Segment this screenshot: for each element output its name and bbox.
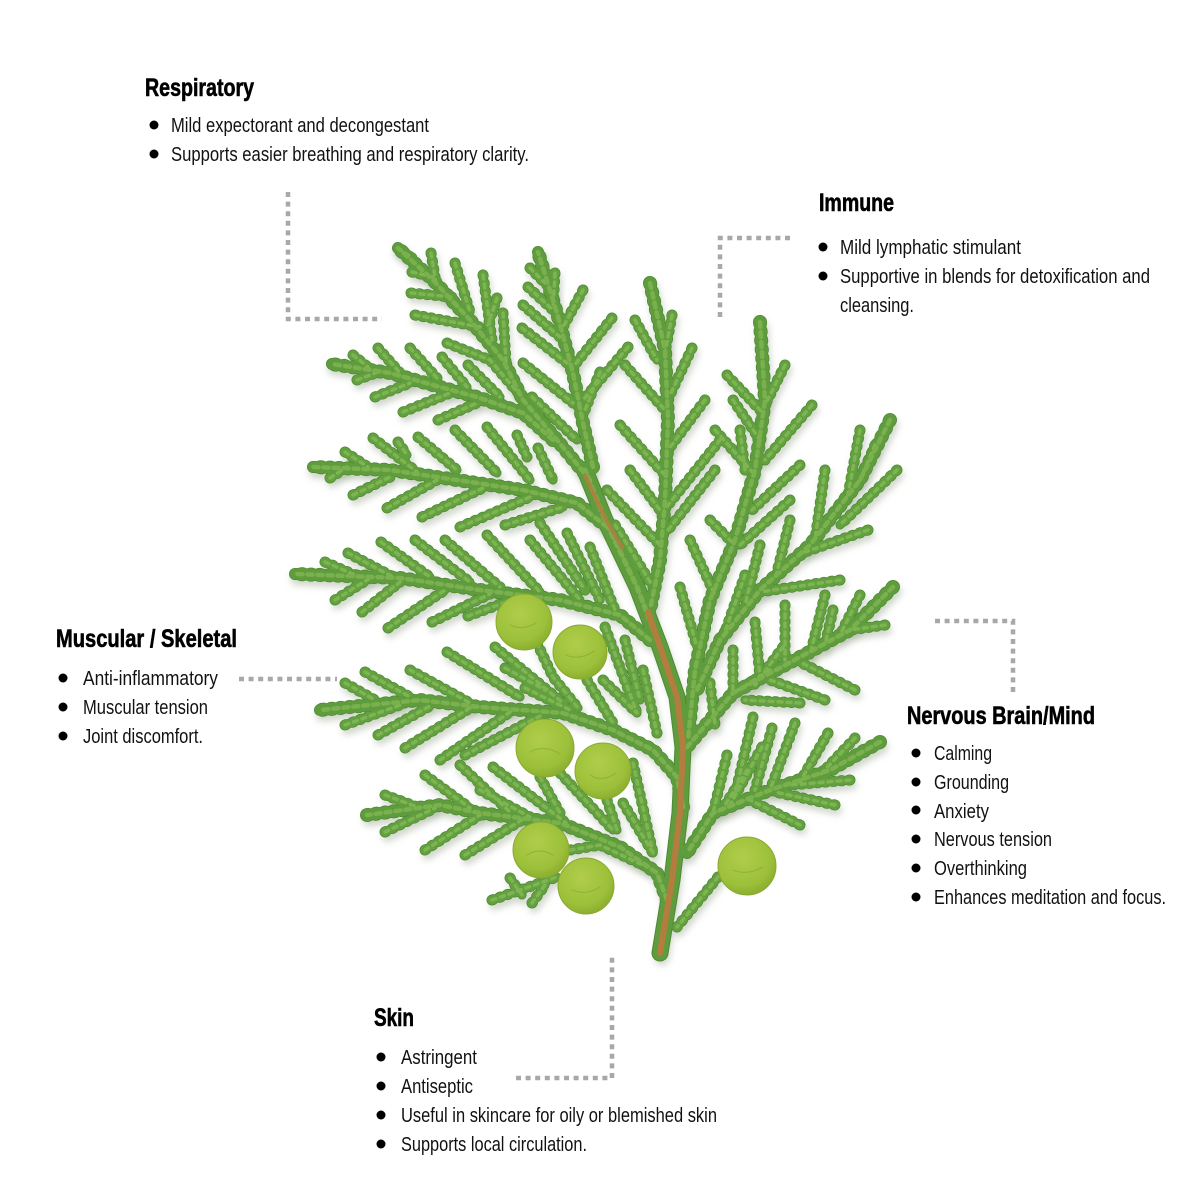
sprig shadow xyxy=(297,253,899,958)
list: respiratory: Mild expectorant and decongestant xyxy=(171,114,429,137)
list: skin: Astringent xyxy=(401,1046,477,1069)
list: muscular / skeletal xyxy=(58,667,219,748)
text block: skin xyxy=(374,1004,717,1156)
list: nervous brain/mind: Grounding xyxy=(934,771,1009,794)
heading: skin: Skin xyxy=(374,1004,414,1032)
list: respiratory: Supports easier breathing and respiratory clarity. xyxy=(171,143,529,166)
heading: nervous brain/mind: Nervous Brain/Mind xyxy=(907,702,1095,730)
text block: respiratory xyxy=(145,74,529,166)
text block: immune xyxy=(818,189,1150,317)
callout connector: respiratory xyxy=(288,192,382,319)
stem bark xyxy=(585,475,683,953)
callout connector: nervous xyxy=(935,621,1013,692)
list: nervous brain/mind xyxy=(912,742,1166,909)
illustration: thuja sprig with berries xyxy=(295,248,899,958)
list: immune xyxy=(818,236,1150,317)
callout connector: skin xyxy=(516,955,612,1078)
list: nervous brain/mind: Calming xyxy=(934,742,992,765)
heading: muscular / skeletal: Muscular / Skeletal xyxy=(56,625,237,653)
list: skin: Supports local circulation. xyxy=(401,1133,587,1156)
heading: respiratory: Respiratory xyxy=(145,74,254,102)
list: respiratory xyxy=(150,114,529,166)
list: skin xyxy=(376,1046,717,1156)
berries xyxy=(496,594,776,914)
list: skin: Useful in skincare for oily or blemished skin xyxy=(401,1104,717,1127)
list: nervous brain/mind: Anxiety xyxy=(934,800,990,823)
list: nervous brain/mind: Nervous tension xyxy=(934,828,1052,851)
list: immune: cleansing. xyxy=(840,294,914,317)
text block: nervous brain/mind xyxy=(907,702,1166,909)
list: skin: Antiseptic xyxy=(401,1075,473,1098)
list: muscular / skeletal: Anti-inflammatory xyxy=(83,667,219,690)
list: muscular / skeletal: Joint discomfort. xyxy=(83,725,203,748)
text block: muscular / skeletal xyxy=(56,625,237,748)
list: nervous brain/mind: Overthinking xyxy=(934,857,1027,880)
heading: immune: Immune xyxy=(819,189,894,217)
list: muscular / skeletal: Muscular tension xyxy=(83,696,208,719)
callout connector: immune xyxy=(720,238,790,318)
callout connector: muscular xyxy=(239,677,337,681)
list: immune: Mild lymphatic stimulant xyxy=(840,236,1021,259)
sprig foliage xyxy=(295,248,897,953)
